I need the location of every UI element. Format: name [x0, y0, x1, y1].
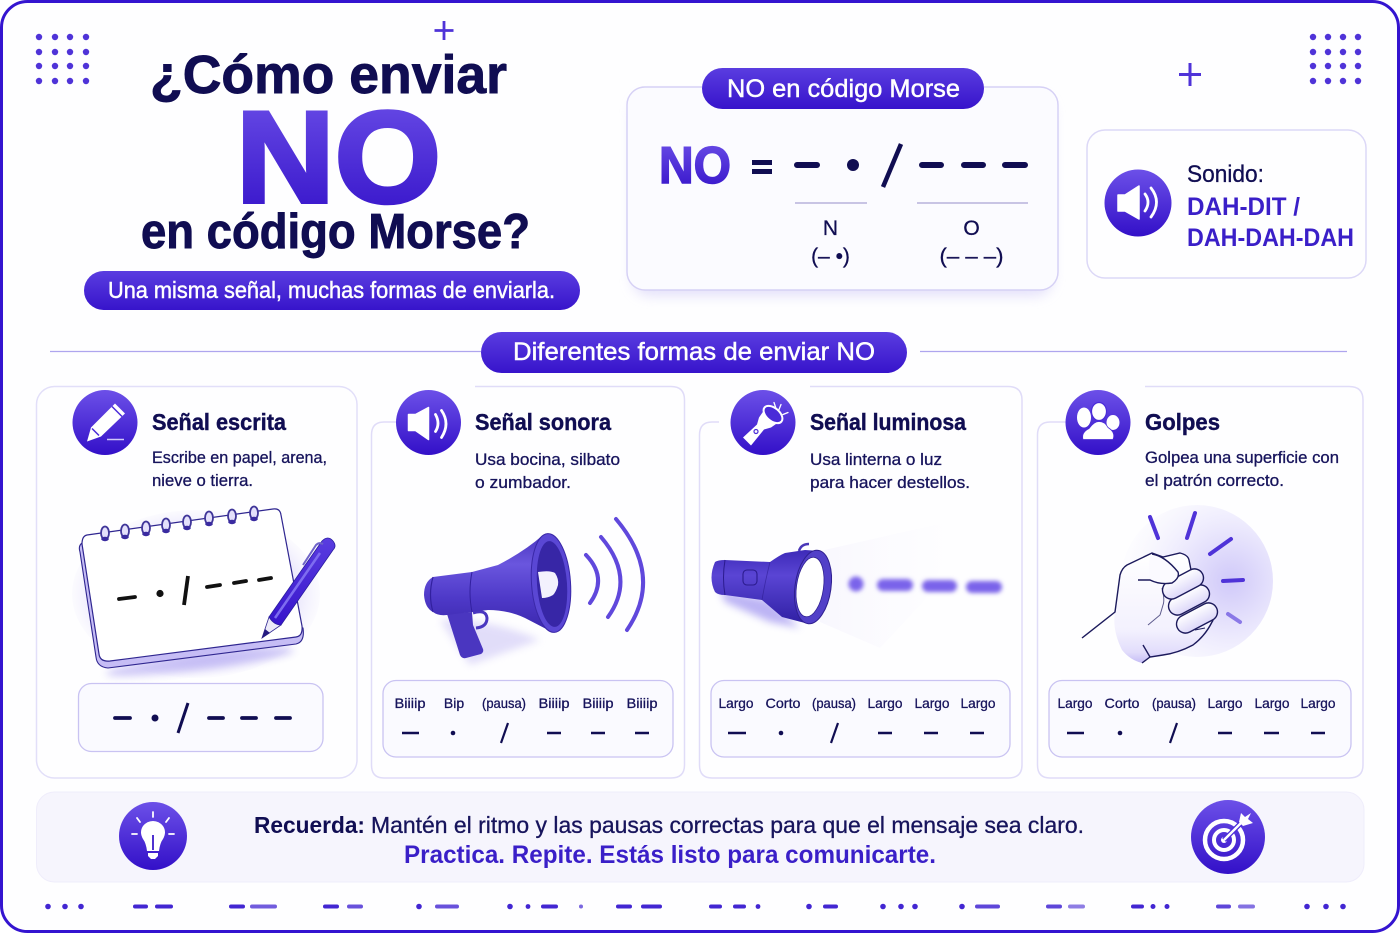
notebook spiral: [101, 506, 258, 540]
description: nieve o tierra.: [152, 472, 253, 490]
label O: [940, 217, 1004, 268]
morse box: Corto: [1104, 695, 1140, 711]
label N: (– •): [811, 245, 850, 268]
icon: people: [1066, 390, 1130, 455]
heading: Señal sonora: [475, 409, 611, 435]
label O: O: [963, 217, 980, 240]
morse box: Largo: [1208, 695, 1243, 711]
title: NO: [236, 84, 441, 230]
panel: Sonido: [1087, 130, 1366, 278]
description: Usa bocina, silbato: [475, 451, 620, 469]
subtitle pill: Una misma señal, muchas formas de enviarla.: [108, 277, 555, 303]
panel: Recuerda: [36, 792, 1364, 882]
description: [475, 451, 620, 492]
morse box: Biiiip: [394, 695, 426, 711]
sound text: DAH-DIT /: [1187, 193, 1300, 221]
description: el patrón correcto.: [1145, 472, 1284, 490]
morse box: Largo: [914, 695, 950, 711]
icon: flashlight: [730, 390, 796, 455]
description: Escribe en papel, arena,: [152, 449, 327, 467]
morse box: Biiiip: [582, 695, 614, 711]
morse box: Corto: [766, 695, 801, 711]
footer morse strip: [45, 904, 1346, 909]
subtitle pill: [84, 271, 580, 310]
illustration: megaphone: [424, 532, 574, 665]
decoration: dot grid right: [1310, 34, 1361, 84]
illustration: fist: [1082, 505, 1273, 663]
decoration: plus top: [434, 21, 454, 40]
panel: NO en código Morse: [627, 68, 1058, 296]
sound waves: [586, 519, 643, 630]
icon: light bulb: [119, 802, 187, 870]
reminder text: Mantén el ritmo y las pausas correctas para que el mensaje sea claro.: [371, 812, 1084, 838]
morse box: [383, 680, 673, 757]
decoration: plus right: [1179, 63, 1201, 86]
title: en código Morse?: [141, 205, 530, 259]
sound text: DAH-DAH-DAH: [1187, 224, 1354, 252]
morse box: Largo: [718, 695, 754, 711]
panel heading pill: [702, 68, 984, 109]
underline N: [795, 202, 1028, 204]
sound text: Sonido:: [1187, 161, 1264, 188]
label O: (– – –): [940, 245, 1004, 268]
reminder text: Practica. Repite. Estás listo para comunicarte.: [404, 841, 936, 869]
heading: Golpes: [1145, 409, 1220, 435]
morse box: (pausa): [482, 695, 526, 711]
spiral holes: [101, 517, 258, 541]
morse box: Largo: [960, 695, 996, 711]
label N: [811, 217, 850, 268]
icon: speaker: [1104, 170, 1172, 236]
illustration: flashlight: [712, 518, 965, 648]
panel: Señal sonora: [372, 386, 684, 778]
morse box: Biiiip: [538, 695, 570, 711]
section divider heading: Diferentes formas de enviar NO: [513, 338, 875, 366]
morse box: Bip: [444, 695, 464, 711]
handwritten morse: [119, 576, 271, 605]
description: para hacer destellos.: [810, 474, 970, 492]
icon: target: [1191, 800, 1265, 874]
icon: pencil: [72, 390, 138, 455]
morse box: [1049, 680, 1351, 757]
panel heading pill: NO en código Morse: [727, 75, 960, 103]
description: [152, 449, 327, 490]
impact lines: [1150, 513, 1243, 622]
title: [141, 45, 530, 259]
title: ¿Cómo enviar: [150, 45, 507, 105]
morse box: (pausa): [812, 695, 856, 711]
morse box: Largo: [1058, 695, 1093, 711]
equals sign: [752, 160, 772, 174]
reminder text: Recuerda:: [254, 812, 365, 838]
thumb: [1149, 556, 1178, 584]
heading: Señal luminosa: [810, 409, 966, 435]
morse box: (pausa): [1152, 695, 1196, 711]
decoration: dot grid left: [36, 34, 89, 84]
label N: N: [823, 217, 838, 240]
panel: Señal luminosa: [700, 386, 1022, 778]
pen: [262, 538, 335, 638]
description: o zumbador.: [475, 474, 571, 492]
panel: Golpes: [1038, 386, 1363, 778]
description: [810, 451, 970, 492]
morse box: Largo: [1300, 695, 1336, 711]
morse box: Largo: [1254, 695, 1290, 711]
illustration: notebook and pen: [72, 506, 335, 682]
morse box: Largo: [868, 695, 903, 711]
description: [1145, 449, 1339, 490]
light flashes: [848, 576, 1002, 593]
panel: Señal escrita: [36, 386, 357, 778]
morse box: Biiiip: [626, 695, 658, 711]
fist inner crease: [1148, 588, 1164, 625]
icon: speaker: [396, 390, 461, 455]
description: Usa linterna o luz: [810, 451, 942, 469]
reminder text: [254, 812, 1084, 869]
section divider heading: [50, 332, 1347, 373]
sound text: [1187, 161, 1354, 252]
description: Golpea una superficie con: [1145, 449, 1339, 467]
heading: Señal escrita: [152, 409, 286, 435]
morse box: [78, 684, 323, 752]
NO word: NO: [659, 137, 731, 195]
morse code: [797, 144, 1025, 187]
morse box: [711, 680, 1010, 757]
fingers: [1159, 566, 1221, 636]
